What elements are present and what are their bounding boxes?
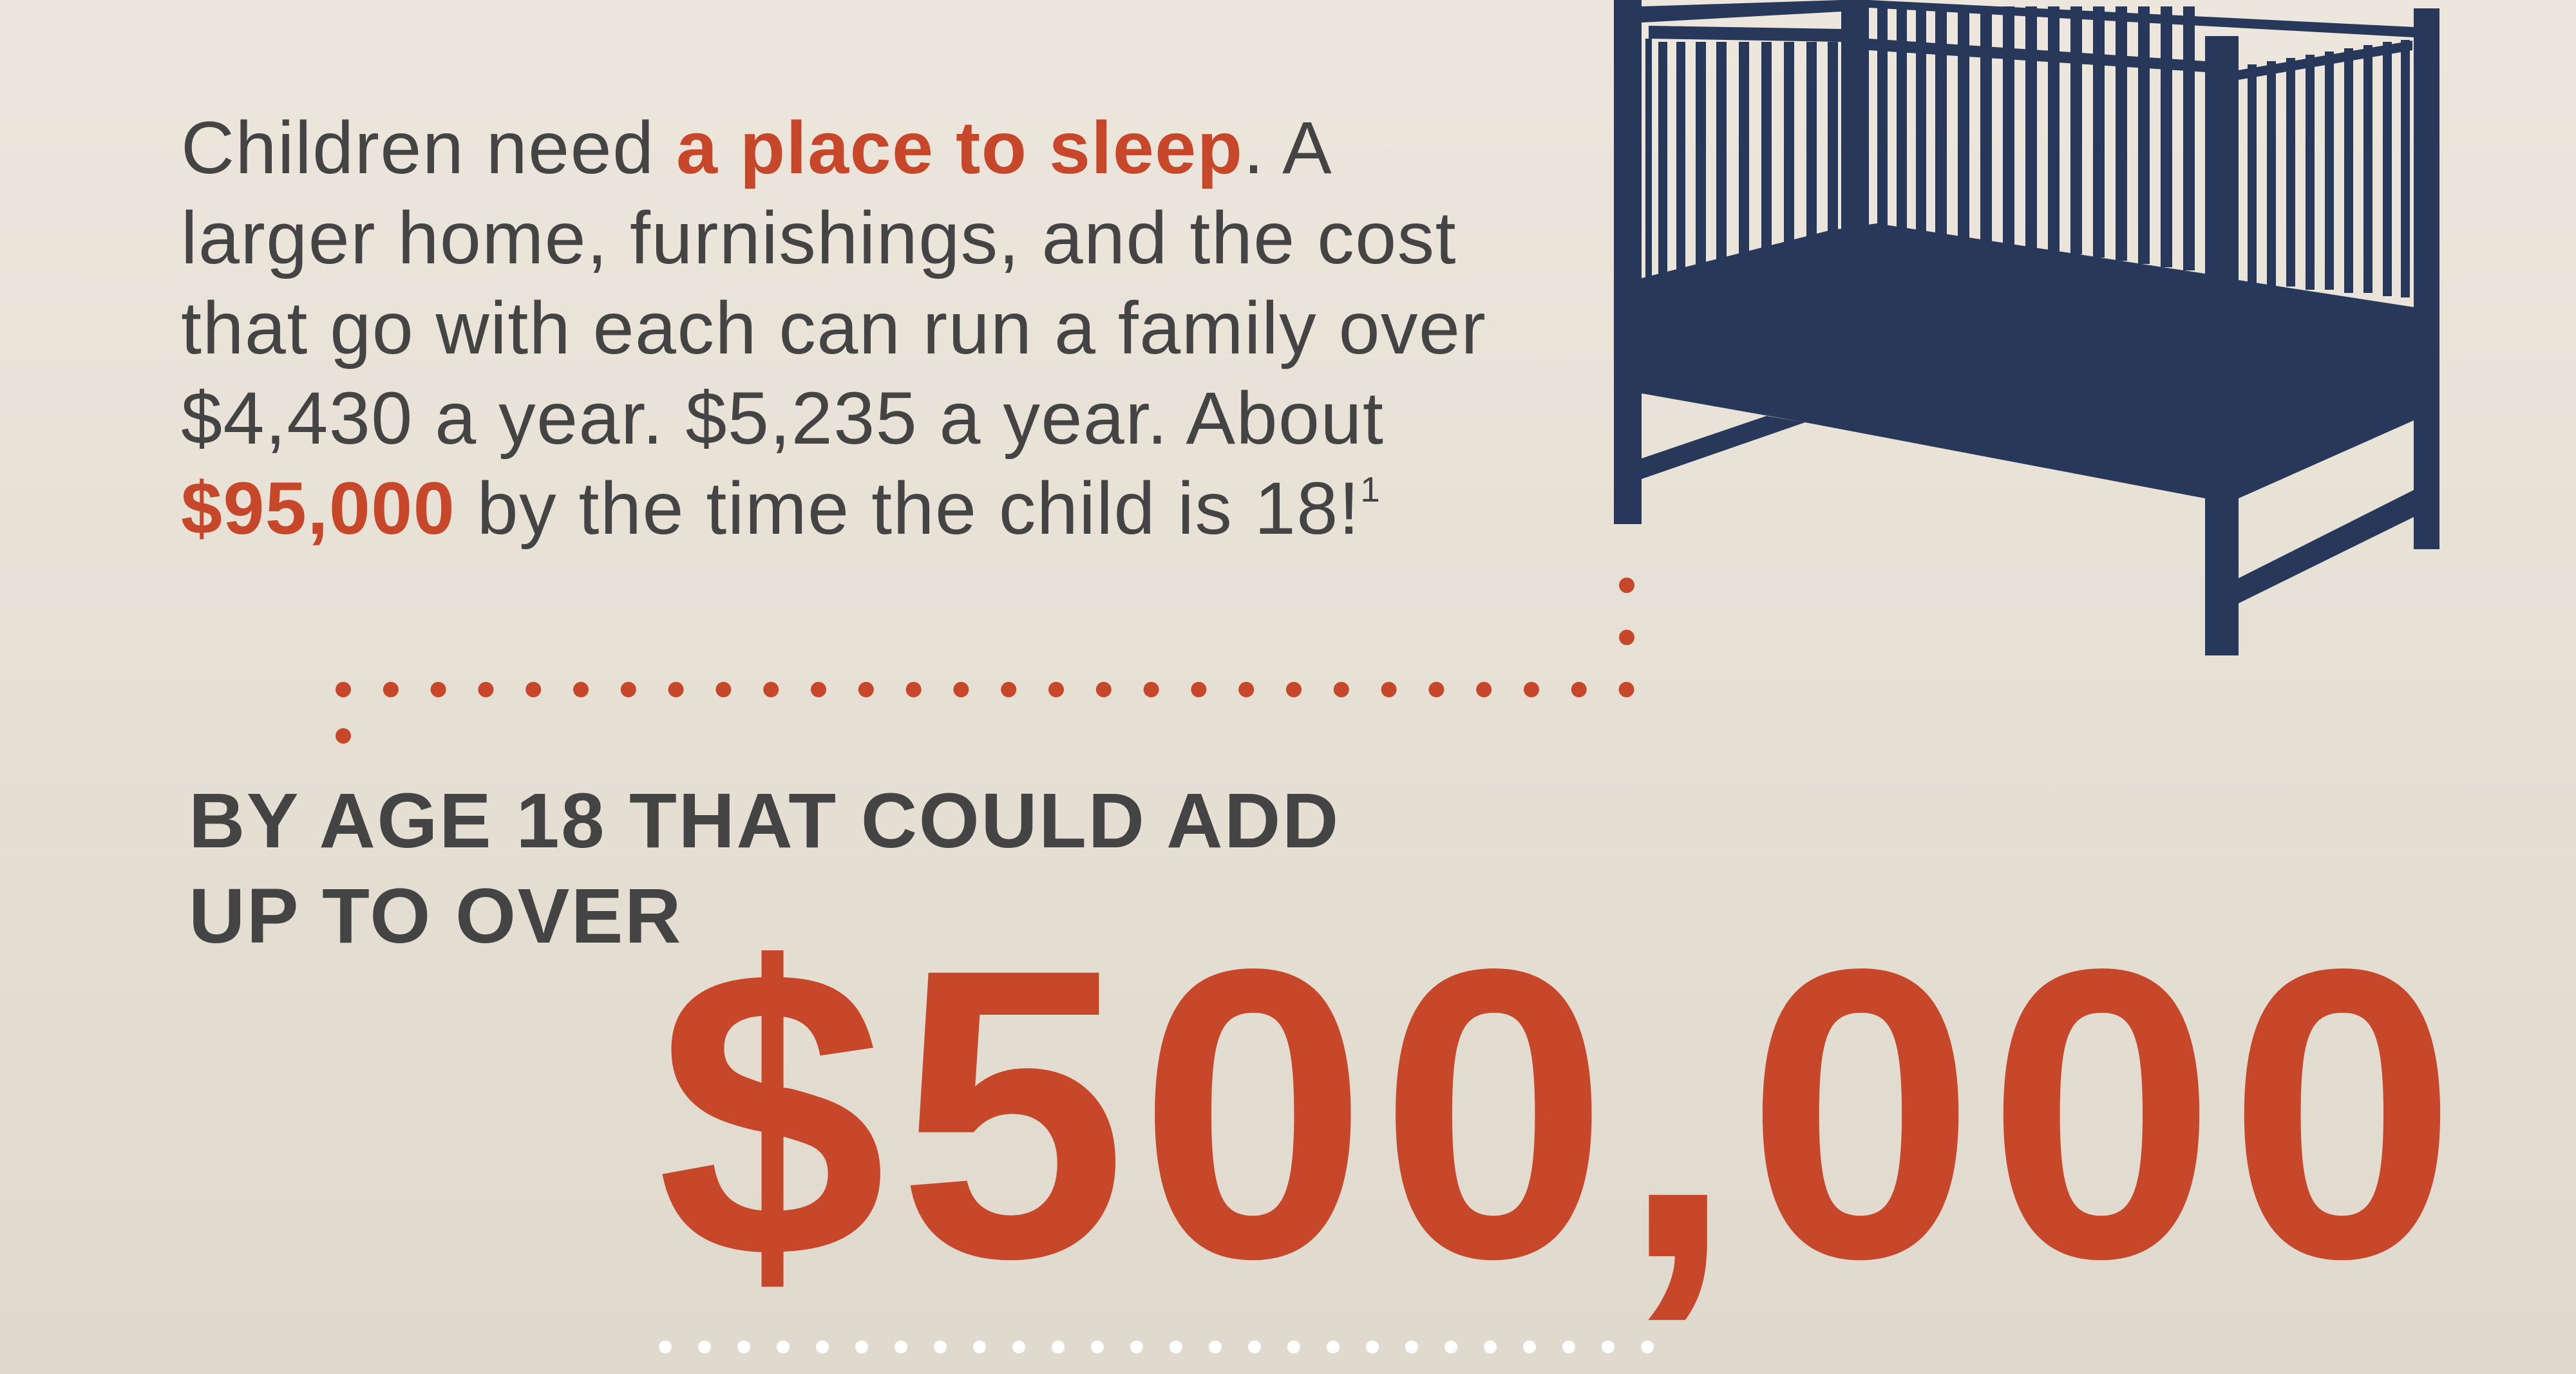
text block: sleep cost: $95,000 by the time the child is 18!1 bbox=[181, 467, 1381, 550]
text block: sleep cost bbox=[181, 107, 1486, 550]
text block: sleep cost: larger home, furnishings, and the cost bbox=[181, 197, 1457, 279]
heading: BY AGE 18 THAT COULD ADD bbox=[189, 776, 1340, 864]
text block: sleep cost: that go with each can run a family over bbox=[181, 287, 1486, 370]
heading bbox=[189, 776, 1340, 959]
text block: sleep cost: $4,430 a year. $5,235 a year. About bbox=[181, 377, 1384, 460]
big number: $500,000 bbox=[657, 883, 2468, 1344]
icon: crib bbox=[1614, 0, 2439, 655]
text block: sleep cost: Children need a place to sleep. A bbox=[181, 107, 1332, 189]
heading: UP TO OVER bbox=[189, 872, 683, 959]
